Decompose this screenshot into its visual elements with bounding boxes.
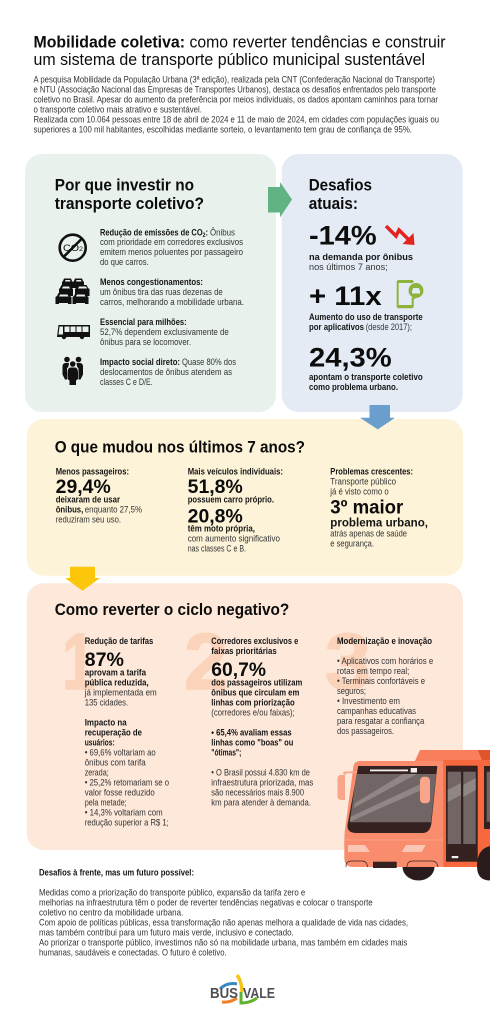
column: priority corridors: infraestrutura priorizada, mas — [211, 778, 314, 788]
panel: current challenges — [282, 154, 463, 412]
text: emissions — [100, 227, 244, 267]
heading: why invest: transporte coletivo? — [55, 194, 204, 213]
column: modernization: • Aplicativos com horários e — [337, 656, 433, 666]
icon: red down arrow — [386, 226, 414, 245]
column: fare reduction: ônibus com tarifa — [85, 758, 146, 768]
column: growing problems: Problemas crescentes: — [330, 466, 413, 476]
column: more individual vehicles: 20,8% — [188, 506, 243, 527]
column: more individual vehicles: nas classes C e B. — [188, 544, 246, 554]
text: social impact: Quase 80% dos — [182, 357, 237, 367]
column: modernization: • Investimento em — [337, 696, 400, 706]
column: fare reduction: usuários: — [85, 738, 115, 748]
column: modernization — [337, 636, 433, 736]
closing text: humanas, saudáveis e conectadas. O futuro é coletivo. — [39, 947, 227, 957]
panel: what changed — [27, 419, 463, 576]
column: modernization: rotas em tempo real; — [337, 666, 409, 676]
column: priority corridors: • 65,4% avaliam essas — [211, 728, 292, 738]
panel: how to reverse — [27, 583, 463, 850]
icon: people — [62, 357, 83, 385]
column: priority corridors: dos passageiros utilizam — [211, 678, 302, 688]
title: como reverter tendências e construir — [190, 32, 446, 52]
column: fare reduction: aprovam a tarifa — [85, 668, 146, 678]
stat: 24,3%: 24,3% — [309, 343, 392, 373]
column: priority corridors: 60,7% — [211, 660, 266, 681]
column: growing problems: atrás apenas de saúde — [330, 529, 407, 539]
column: fare reduction: recuperação de — [85, 728, 142, 738]
intro text: e NTU (Associação Nacional das Empresas de Transportes Urbanos), destaca os desafios enfrentados pelo transporte — [34, 84, 436, 94]
stat: -14%: na demanda por ônibus — [309, 252, 413, 262]
text: emissions: do que carros. — [100, 257, 149, 267]
column: growing problems: 3º maior — [330, 497, 404, 518]
illustration: orange bus — [338, 750, 490, 880]
text: social impact: classes C e D/E. — [100, 377, 153, 387]
closing text — [39, 868, 408, 957]
intro text: Realizada com 10.064 pessoas entre 18 de abril de 2024 e 11 de maio de 2024, em cidades com populações iguais ou — [34, 114, 439, 124]
stat: 24,3%: apontam o transporte coletivo — [309, 372, 423, 382]
icon: bus — [57, 325, 90, 339]
logo: BusVale: BUS — [210, 985, 238, 1002]
column: priority corridors: (corredores e/ou faixas); — [211, 708, 295, 718]
column: fare reduction: zerada; — [85, 768, 109, 778]
text: essential — [100, 317, 229, 347]
column: fare reduction: Impacto na — [85, 718, 127, 728]
icon: phone with taxi — [397, 280, 424, 308]
heading: how to reverse: Como reverter o ciclo negativo? — [55, 600, 289, 619]
arrow: blue — [360, 405, 395, 429]
column: fare reduction: pública reduzida, — [85, 678, 149, 688]
text: emissions: : — [206, 227, 208, 237]
column: priority corridors: faixas prioritárias — [211, 646, 277, 656]
stat: -14% — [309, 220, 413, 272]
column: priority corridors: linhas com priorização — [211, 698, 295, 708]
stat: 24,3%: como problema urbano. — [309, 382, 398, 392]
column: fare reduction: • 14,3% voltariam com — [85, 808, 163, 818]
column: fare reduction — [84, 636, 169, 828]
column: growing problems: Transporte público — [330, 476, 396, 486]
icon: congested cars — [56, 278, 90, 304]
stat: +11x: + 11x — [309, 281, 382, 311]
text: essential: 52,7% dependem exclusivamente de — [100, 327, 229, 337]
column: fare reduction: • 25,2% retomariam se o — [85, 778, 169, 788]
intro text — [34, 74, 439, 134]
column: growing problems: e segurança. — [330, 539, 374, 549]
text: social impact: Impacto social direto: — [100, 357, 180, 367]
column: modernization: campanhas educativas — [337, 706, 417, 716]
stat: -14%: nos últimos 7 anos; — [309, 262, 388, 272]
heading: challenges — [309, 176, 372, 213]
column: more individual vehicles: 51,8% — [188, 477, 243, 498]
stat: +11x — [309, 281, 423, 332]
column: priority corridors: linhas como "boas" ou — [211, 738, 293, 748]
column: fare reduction: Redução de tarifas — [85, 636, 153, 646]
panel: why invest — [25, 154, 276, 412]
text: emissions: 2 — [203, 233, 206, 239]
closing text: Ao priorizar o transporte público, investimos não só na mobilidade urbana, mas também em cidades mais — [39, 937, 408, 947]
text: congestion — [100, 277, 244, 307]
arrow: yellow — [65, 567, 100, 591]
text: congestion: um ônibus tira das ruas dezenas de — [100, 287, 223, 297]
closing text: coletivo no centro da mobilidade urbana. — [39, 907, 183, 917]
logo: BusVale — [210, 975, 275, 1003]
column: priority corridors: são necessários mais 8.900 — [211, 788, 304, 798]
column: fewer passengers — [56, 466, 142, 525]
closing text: melhorias na infraestrutura têm o poder de reverter tendências negativas e colocar o transporte — [39, 897, 373, 907]
text: emissions: emitem menos poluentes por passageiro — [100, 247, 243, 257]
text: emissions: Redução de emissões de CO — [100, 227, 221, 237]
closing text: mas também contribui para um futuro mais verde, inclusivo e conectado. — [39, 927, 294, 937]
column: priority corridors: km para atender à demanda. — [211, 798, 311, 808]
column: more individual vehicles: com aumento significativo — [188, 534, 280, 544]
closing text: Medidas como a priorização do transporte público, expansão da tarifa zero e — [39, 887, 305, 897]
column: priority corridors: ônibus que circulam em — [211, 688, 299, 698]
heading: what changed: O que mudou nos últimos 7 anos? — [55, 438, 305, 457]
heading: why invest — [55, 176, 204, 213]
column: fare reduction: • 69,6% voltariam ao — [85, 748, 156, 758]
text: essential: ônibus para se locomover. — [100, 337, 191, 347]
column: modernization: Modernização e inovação — [337, 636, 433, 646]
text: social impact: deslocamentos de ônibus atendem as — [100, 367, 233, 377]
column: priority corridors — [211, 636, 314, 808]
stat: +11x: por aplicativos — [309, 322, 364, 332]
closing text: Com apoio de políticas públicas, essa transformação não apenas melhora a qualidade de vida nas cidades, — [39, 917, 408, 927]
title: Mobilidade coletiva: — [34, 32, 185, 52]
stat: +11x: Aumento do uso de transporte — [309, 312, 423, 322]
intro text: coletivo no Brasil. Apesar do aumento da preferência por meios individuais, os dados apontam caminhos para tornar — [34, 94, 438, 104]
column: modernization: para resgatar a confiança — [337, 716, 424, 726]
stat: 24,3% — [309, 343, 423, 392]
heading: challenges: atuais: — [309, 194, 358, 213]
intro text: superiores a 100 mil habitantes, escolhidas mediante sorteio, o levantamento tem grau de confiança de 95%. — [34, 124, 412, 134]
title: um sistema de transporte público municipal sustentável — [34, 50, 425, 69]
column: more individual vehicles: têm moto própria, — [188, 524, 255, 534]
title — [34, 32, 446, 69]
column: priority corridors: Corredores exclusivos e — [211, 636, 298, 646]
text: emissions: Ônibus — [210, 227, 236, 237]
column: fewer passengers: ônibus, — [56, 505, 83, 515]
column: fewer passengers: reduziram seu uso. — [56, 515, 121, 525]
stat: +11x: (desde 2017); — [366, 322, 412, 332]
column: modernization: • Terminais confortáveis e — [337, 676, 425, 686]
column: fare reduction: valor fosse reduzido — [85, 788, 155, 798]
column: modernization: dos passageiros. — [337, 726, 394, 736]
column: modernization: seguros; — [337, 686, 366, 696]
column: growing problems: problema urbano, — [330, 518, 428, 530]
stat: -14%: -14% — [309, 220, 377, 250]
column: more individual vehicles — [188, 466, 283, 554]
text: congestion: Menos congestionamentos: — [100, 277, 203, 287]
column: fewer passengers: deixaram de usar — [56, 495, 121, 505]
text: social impact — [100, 357, 237, 387]
column: growing problems — [329, 466, 428, 549]
column: fare reduction: pela metade; — [85, 798, 127, 808]
intro text: A pesquisa Mobilidade da População Urbana (3ª edição), realizada pela CNT (Confederação Nacional do Transporte) — [34, 74, 435, 84]
column: priority corridors: "ótimas"; — [211, 748, 241, 758]
column: more individual vehicles: Mais veículos individuais: — [188, 466, 283, 476]
column: fare reduction: redução superior a R$ 1; — [85, 818, 169, 828]
column: growing problems: já é visto como o — [329, 486, 389, 496]
closing text: Desafios à frente, mas um futuro possível: — [39, 868, 194, 878]
column: fewer passengers: 29,4% — [56, 477, 111, 498]
icon: no CO2 — [60, 235, 86, 261]
icon: no CO2: CO 2 — [63, 243, 84, 253]
column: fewer passengers: enquanto 27,5% — [85, 505, 142, 515]
heading: challenges: Desafios — [309, 176, 372, 195]
column: fare reduction: 135 cidades. — [85, 698, 128, 708]
column: more individual vehicles: possuem carro próprio. — [188, 495, 274, 505]
column: fare reduction: 87% — [85, 650, 124, 671]
text: congestion: carros, melhorando a mobilidade urbana. — [100, 297, 244, 307]
column: fare reduction: já implementada em — [84, 688, 157, 698]
text: emissions: com prioridade em corredores exclusivos — [100, 237, 244, 247]
column: fewer passengers: Menos passageiros: — [56, 466, 129, 476]
logo: BusVale: VALE — [243, 985, 275, 1002]
number 3: 3 — [325, 617, 371, 706]
intro text: o transporte coletivo mais atrativo e sustentável. — [34, 104, 202, 114]
number 1: 1 — [62, 617, 95, 706]
column: priority corridors: • O Brasil possui 4.830 km de — [211, 768, 310, 778]
text: essential: Essencial para milhões: — [100, 317, 187, 327]
arrow: green — [268, 182, 292, 218]
heading: why invest: Por que investir no — [55, 176, 194, 195]
number 2: 2 — [184, 617, 228, 706]
